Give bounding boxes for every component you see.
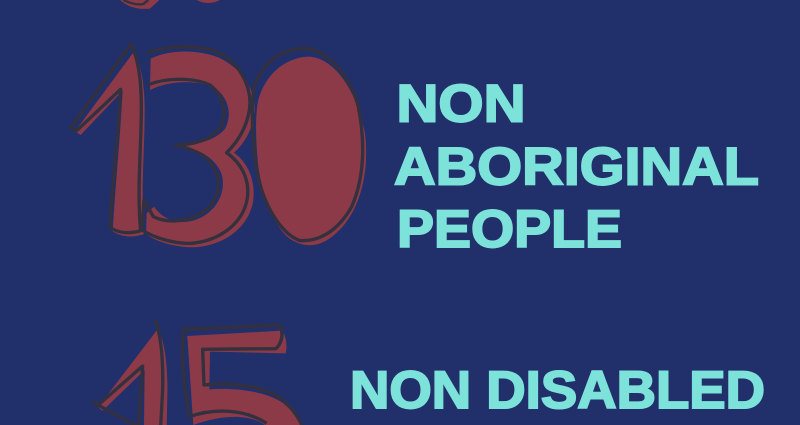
label: NON ABORIGINAL PEOPLE [394, 74, 759, 259]
number: 130 [71, 44, 366, 247]
label: NON DISABLED: NON DISABLED [350, 361, 765, 420]
digit 1 outline [71, 44, 141, 233]
digit 5 fill [187, 331, 303, 425]
label line: NON: NON [396, 74, 526, 134]
label line: PEOPLE: PEOPLE [397, 200, 622, 259]
number: 15 (cropped at bottom) [93, 319, 303, 425]
digit 0 fill [256, 57, 366, 245]
digit 1 fill [75, 52, 145, 236]
digit 3 fill [146, 51, 255, 247]
digit 3 outline [142, 47, 250, 243]
digit 0 outline [252, 48, 363, 241]
label line: ABORIGINAL: ABORIGINAL [394, 138, 759, 196]
digit 1 outline [93, 319, 163, 425]
digit 1 fill [98, 328, 167, 425]
number fragment: cropped digits at top edge [120, 0, 220, 9]
digit 5 outline [183, 325, 302, 425]
